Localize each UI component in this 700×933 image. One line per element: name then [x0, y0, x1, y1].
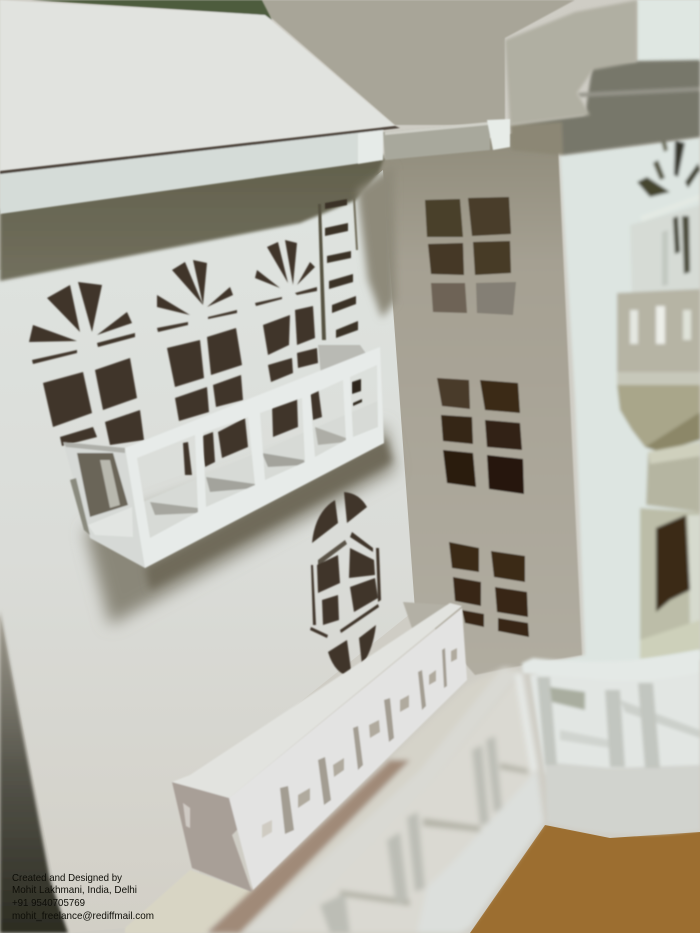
- window with fan light 2: [157, 260, 248, 475]
- right ledge and dark doorway: [640, 442, 700, 660]
- planter tall slits: [280, 648, 447, 834]
- top right bright patch: [637, 0, 700, 62]
- balcony back and floor: [90, 345, 384, 568]
- upper balcony: [63, 345, 384, 568]
- foreground brown strip: [207, 760, 410, 933]
- upper roof slope: [262, 0, 575, 125]
- credit text: [12, 872, 154, 922]
- arched oval window: [310, 492, 381, 677]
- planter end face: [172, 782, 252, 892]
- windows: middle wall centre group: [437, 378, 524, 494]
- windows: middle wall upper group: [425, 197, 516, 315]
- foreground rail: [243, 668, 520, 933]
- right balcony with slits: [617, 289, 700, 452]
- windows: middle wall lower group: [449, 542, 529, 637]
- foreground right post: [515, 672, 538, 772]
- wall turn shading beside slats: [357, 165, 396, 318]
- curved balcony drum: [545, 762, 700, 834]
- balcony front panel with openings: [125, 347, 384, 568]
- credit text: Created and Designed by: [12, 872, 123, 884]
- right side wall: [520, 136, 700, 670]
- dark band under roof box: [510, 60, 700, 155]
- top right roof box: [505, 0, 637, 125]
- slatted vertical window: [318, 198, 358, 340]
- credit text: Mohit Lakhmani, India, Delhi: [12, 884, 137, 896]
- curved balcony inner panel: [550, 687, 585, 710]
- window with fan light 3: [255, 240, 322, 437]
- upper right window panel: [630, 136, 700, 296]
- curved balcony interior: [530, 660, 700, 775]
- foreground balcony: [205, 667, 544, 933]
- base ground strip: [125, 870, 253, 933]
- main front wall: [0, 170, 415, 933]
- planter top ledge: [172, 603, 462, 798]
- floor: brown table surface: [470, 825, 700, 933]
- foreground posts: [320, 736, 502, 933]
- curved balcony top rail: [522, 650, 700, 680]
- window with fan light 1: [29, 282, 144, 446]
- planter small squares: [262, 648, 457, 838]
- credit text: mohit_freelance@rediffmail.com: [12, 910, 154, 922]
- planter back panel: [403, 602, 462, 640]
- roof left slope: [0, 0, 395, 172]
- credit text: +91 9540705769: [12, 897, 85, 909]
- foreground low panel: [417, 770, 544, 933]
- balcony inner end window: [352, 379, 362, 406]
- curved balcony posts: [537, 677, 660, 768]
- foreground shadow streaks: [340, 763, 528, 906]
- eaves fascia: [0, 119, 510, 214]
- balcony end frame: [63, 442, 145, 568]
- planter front panel: [229, 608, 467, 890]
- shadow under the eaves: [0, 155, 385, 281]
- dark lower left corner: [0, 610, 68, 933]
- curved foreground balcony: [522, 650, 700, 834]
- foreground interior: [287, 675, 537, 933]
- balcony shadow on wall: [85, 425, 395, 625]
- middle recessed wall: [375, 125, 582, 675]
- lower planter balcony: [172, 602, 467, 892]
